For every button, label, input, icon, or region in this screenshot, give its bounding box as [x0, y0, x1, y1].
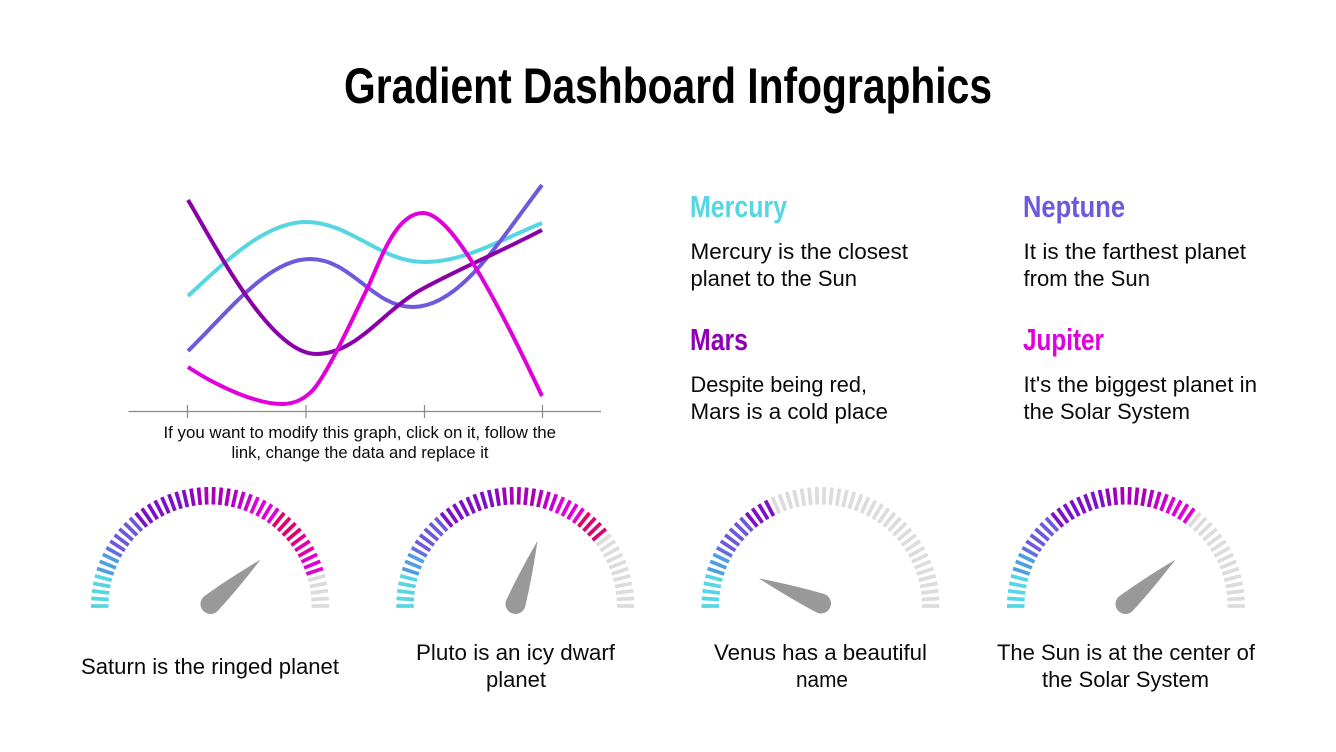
line: purple series: [188, 200, 542, 354]
chart caption: [164, 424, 556, 462]
gauge: Pluto: [396, 487, 634, 692]
chart axis: [128, 405, 601, 418]
caption: Pluto: planet: [486, 667, 547, 692]
panel: line chart: [128, 185, 601, 462]
gauge: Venus: [702, 487, 940, 692]
caption: Venus: Venus has a beautiful: [714, 640, 927, 665]
caption: The Sun: The Sun is at the center of: [997, 640, 1256, 665]
heading: Neptune: Neptune: [1023, 189, 1125, 224]
gauge ticks: The Sun: [1007, 487, 1245, 606]
caption: The Sun: [997, 640, 1256, 692]
body: Jupiter: [1024, 372, 1257, 424]
title: Gradient Dashboard Infographics: [344, 58, 992, 114]
caption: Pluto: Pluto is an icy dwarf: [416, 640, 616, 665]
gauge: The Sun: [997, 487, 1256, 692]
body: Mercury: planet to the Sun: [690, 266, 857, 291]
text block: Neptune: [1023, 189, 1247, 291]
caption: The Sun: the Solar System: [1042, 667, 1209, 692]
gauge ticks: Saturn: [91, 487, 329, 606]
body: Mars: Despite being red,: [690, 372, 867, 397]
chart caption: link, change the data and replace it: [232, 444, 489, 462]
needle: Pluto: [503, 537, 547, 617]
body: Mercury: Mercury is the closest: [690, 239, 909, 264]
body: Neptune: It is the farthest planet: [1024, 239, 1247, 264]
body: Jupiter: It's the biggest planet in: [1024, 372, 1257, 397]
text block: Mars: [690, 322, 888, 424]
caption: Pluto: [416, 640, 616, 692]
body: Jupiter: the Solar System: [1024, 399, 1190, 424]
body: Neptune: from the Sun: [1024, 266, 1150, 291]
chart caption: If you want to modify this graph, click on it, follow the: [164, 424, 556, 442]
text block: Jupiter: [1023, 322, 1257, 424]
heading: Mercury: Mercury: [690, 189, 788, 224]
body: Mercury: [690, 239, 909, 291]
caption: Saturn: Saturn is the ringed planet: [81, 654, 340, 679]
text block: Mercury: [690, 189, 909, 291]
line: cyan series: [188, 222, 542, 296]
body: Mars: Mars is a cold place: [690, 399, 888, 424]
gauge ticks: Pluto: [396, 487, 634, 606]
gauge ticks: Venus: [702, 487, 940, 606]
gauge: Saturn: [81, 487, 340, 679]
caption: Venus: [714, 640, 927, 692]
body: Mars: [690, 372, 888, 424]
needle: Saturn: [196, 552, 267, 618]
heading: Jupiter: Jupiter: [1023, 322, 1104, 357]
caption: Venus: name: [796, 667, 848, 692]
line: magenta series: [188, 213, 542, 404]
body: Neptune: [1024, 239, 1247, 291]
needle: The Sun: [1111, 552, 1182, 618]
needle: Venus: [755, 569, 834, 617]
heading: Mars: Mars: [690, 322, 748, 357]
line: blue-violet series: [188, 185, 542, 351]
